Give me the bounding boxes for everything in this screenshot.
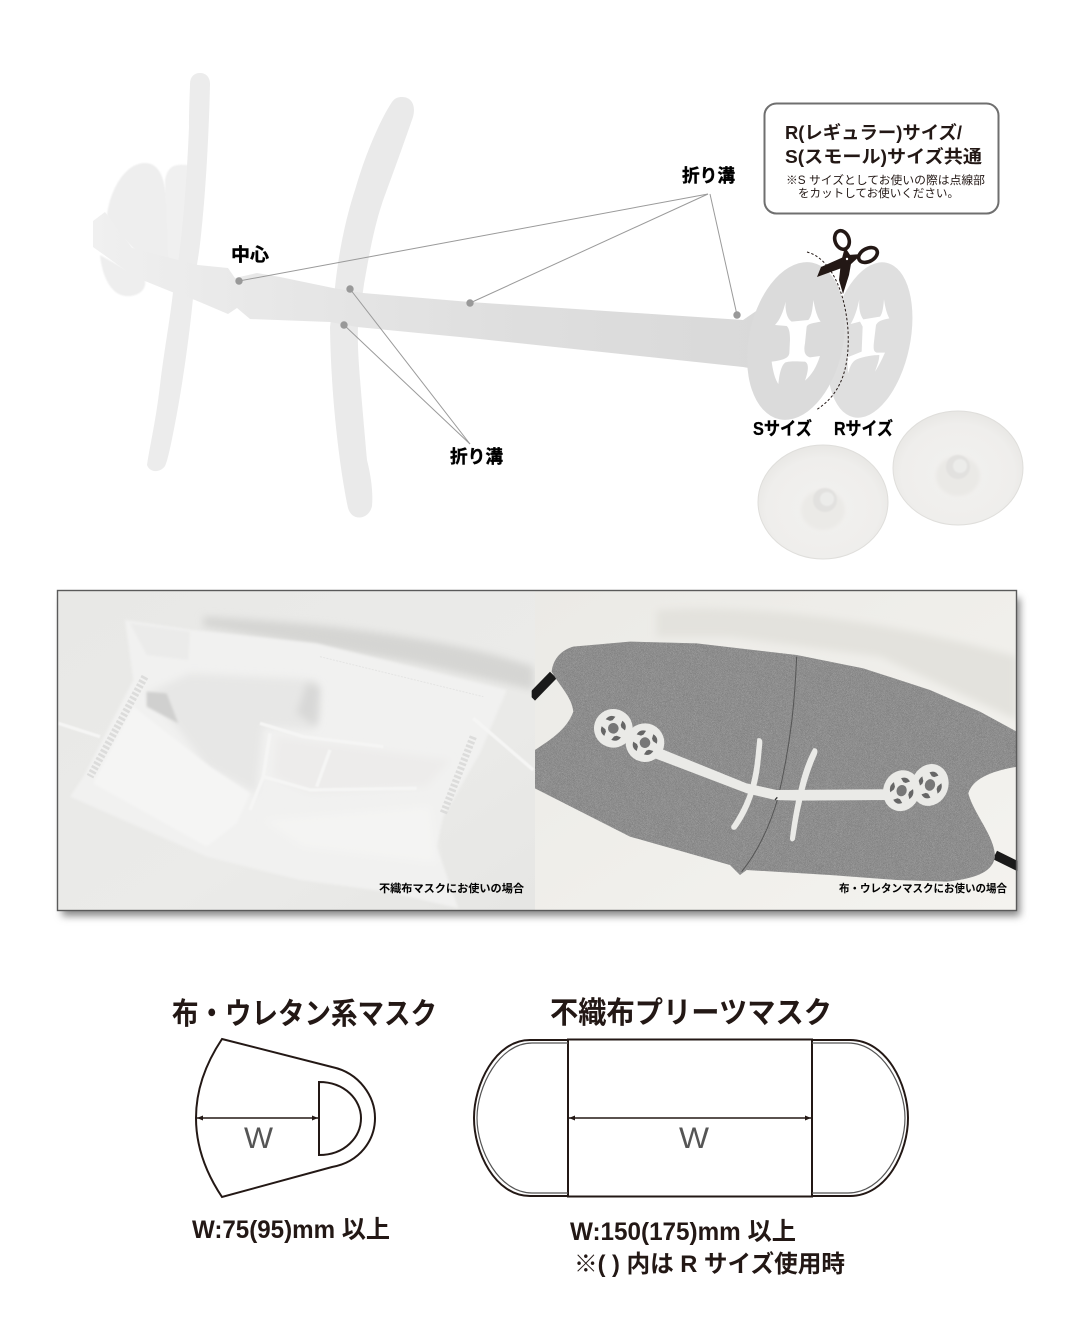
product illustration: inner frame <box>93 73 1023 559</box>
R ring cutout <box>847 299 889 373</box>
diagram: pleated mask: W <box>679 1122 710 1155</box>
text: pleated mask width: W:150(175)mm 以上 <box>570 1218 796 1246</box>
callout dots <box>235 277 741 329</box>
heading: cloth urethane mask: 布・ウレタン系マスク <box>172 998 437 1031</box>
callout: size note box: S(スモール)サイズ共通 <box>785 146 982 167</box>
panel: usage photos <box>57 590 1020 916</box>
far side discs <box>100 163 188 296</box>
front strap <box>330 97 414 518</box>
diagram: pleated mask <box>474 1040 908 1196</box>
label: fold groove upper: 折り溝 <box>682 166 735 186</box>
left strap <box>147 73 210 471</box>
right R ring <box>814 254 926 426</box>
inner frame on mask <box>590 705 954 841</box>
photo: non-woven mask <box>57 590 535 911</box>
callout: size note box: ※S サイズとしてお使いの際は点線部 <box>786 173 985 187</box>
label: fold groove lower: 折り溝 <box>450 447 503 467</box>
callout: size note box: をカットしてお使いください。 <box>798 186 959 200</box>
label: R size: Rサイズ <box>834 418 893 439</box>
cut line <box>807 252 848 410</box>
photo: cloth urethane mask <box>532 590 1020 911</box>
silicone pads <box>758 411 1023 559</box>
text: cloth mask width: W:75(95)mm 以上 <box>192 1216 390 1244</box>
callout: size note box <box>764 104 998 214</box>
left S ring <box>733 253 859 429</box>
S ring cutout <box>772 300 821 384</box>
main band <box>93 212 772 372</box>
label: center: 中心 <box>231 245 269 265</box>
caption: non-woven: 不織布マスクにお使いの場合 <box>379 881 524 895</box>
callout: size note box: R(レギュラー)サイズ/ <box>785 122 962 143</box>
diagram: cloth mask <box>196 1039 375 1197</box>
text: note: ※( ) 内は R サイズ使用時 <box>574 1250 845 1278</box>
caption: cloth: 布・ウレタンマスクにお使いの場合 <box>839 881 1007 895</box>
callout lines <box>239 194 737 444</box>
icon: scissors <box>817 229 880 294</box>
heading: pleated mask: 不織布プリーツマスク <box>550 997 832 1030</box>
diagram: cloth mask: W <box>244 1122 274 1155</box>
grey mask body <box>535 642 1017 882</box>
label: S size: Sサイズ <box>753 418 812 439</box>
